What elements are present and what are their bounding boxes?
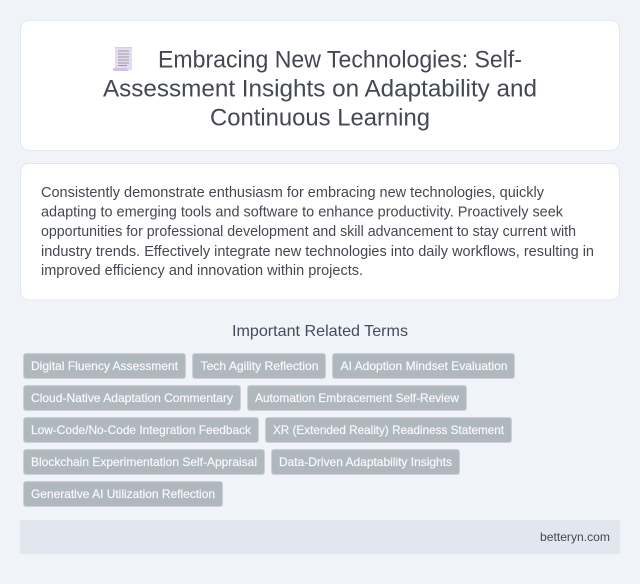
tag: XR readiness	[266, 418, 512, 442]
tag list	[24, 354, 514, 506]
tag: AI adoption	[332, 354, 514, 378]
tag: automation: Automation Embracement Self-Review	[255, 391, 459, 405]
tag: digital fluency	[24, 354, 186, 378]
description text: opportunities for professional development and skill advancement to stay current with	[41, 224, 576, 240]
tag: data-driven	[272, 450, 460, 474]
panel: title card	[20, 20, 620, 150]
footer text: betteryn.com	[540, 530, 610, 544]
title	[103, 46, 537, 132]
description text: Consistently demonstrate enthusiasm for embracing new technologies, quickly	[41, 185, 545, 201]
title: Continuous Learning	[210, 104, 430, 132]
footer bar	[20, 520, 620, 554]
panel: description card	[20, 164, 620, 300]
tag: tech agility: Tech Agility Reflection	[200, 359, 318, 373]
tag: generative AI	[24, 482, 222, 506]
description text: industry trends. Effectively integrate new technologies into daily workflows, resulting in	[41, 244, 594, 260]
tag: cloud-native: Cloud-Native Adaptation Commentary	[31, 391, 233, 405]
tag: blockchain	[24, 450, 264, 474]
tag: cloud-native	[24, 386, 240, 410]
title: Assessment Insights on Adaptability and	[103, 76, 537, 102]
tag: AI adoption: AI Adoption Mindset Evaluation	[340, 359, 508, 373]
description text: adapting to emerging tools and software to enhance productivity. Proactively seek	[41, 204, 564, 220]
tag: data-driven: Data-Driven Adaptability Insights	[279, 455, 452, 469]
tag: digital fluency: Digital Fluency Assessment	[31, 359, 179, 373]
tag: tech agility	[192, 354, 326, 378]
tag: blockchain: Blockchain Experimentation Self-Appraisal	[31, 455, 257, 469]
tag: automation	[248, 386, 466, 410]
tag: low-code: Low-Code/No-Code Integration Feedback	[31, 423, 252, 437]
tag: generative AI: Generative AI Utilization Reflection	[31, 487, 215, 501]
description text: improved efficiency and innovation within projects.	[41, 263, 363, 279]
icon: paper scroll	[113, 47, 132, 71]
description text	[41, 185, 594, 279]
title: Embracing New Technologies: Self-	[158, 46, 522, 74]
tag: XR readiness: XR (Extended Reality) Readiness Statement	[273, 423, 505, 437]
heading: important related terms: Important Related Terms	[232, 323, 408, 340]
tag: low-code	[24, 418, 258, 442]
